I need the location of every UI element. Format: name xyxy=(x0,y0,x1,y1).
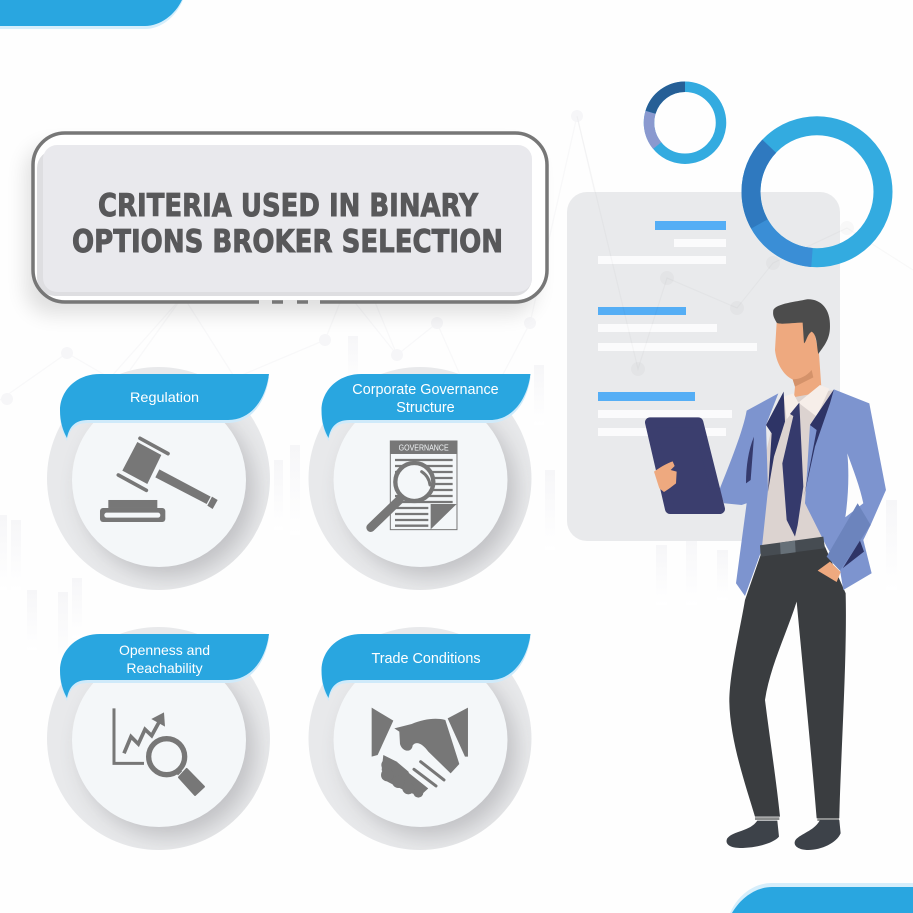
icon: governance document with magnifier: GOVERNANCE xyxy=(399,443,449,453)
jacket inner shadow xyxy=(746,437,754,483)
gap between arm and body xyxy=(845,453,863,517)
sleeve lining xyxy=(843,541,864,568)
document lines: group 2 xyxy=(598,307,757,351)
faint chart line across panel xyxy=(577,116,913,376)
shirt xyxy=(760,390,833,547)
businessman illustration xyxy=(650,299,886,850)
legs xyxy=(729,547,846,818)
tablet xyxy=(650,422,720,509)
label: Trade Conditions xyxy=(371,651,481,667)
icon: governance document with magnifier xyxy=(371,441,457,530)
belt xyxy=(760,537,825,557)
belt buckle xyxy=(780,541,796,554)
large donut chart xyxy=(751,126,883,258)
label: Openness and xyxy=(119,642,210,658)
title outline with gap xyxy=(33,133,547,302)
label: Corporate Governance xyxy=(352,382,499,398)
title dashes xyxy=(272,300,308,304)
sleeve fold xyxy=(827,503,871,571)
icon: chart with magnifier xyxy=(114,708,204,795)
pocket hand xyxy=(818,562,841,582)
document panel xyxy=(567,192,840,541)
label: Regulation xyxy=(130,389,199,405)
icon: handshake xyxy=(372,708,468,798)
icon: gavel xyxy=(100,438,218,522)
title inner plate xyxy=(43,145,532,292)
background: faint chart pattern xyxy=(0,110,897,667)
collar xyxy=(784,385,829,419)
right shoe xyxy=(795,820,841,850)
right lapel xyxy=(804,389,834,497)
hair xyxy=(773,299,830,354)
jaw shadow xyxy=(793,370,813,387)
label: Reachability xyxy=(126,660,203,676)
hand holding tablet xyxy=(654,461,677,492)
title text: OPTIONS BROKER SELECTION xyxy=(72,224,503,260)
sock cuffs xyxy=(755,815,839,824)
card: Corporate Governance Structure xyxy=(308,367,532,590)
title text: CRITERIA USED IN BINARY xyxy=(98,188,478,224)
neck and face xyxy=(775,320,822,405)
card: Openness and Reachability xyxy=(47,627,270,850)
bottom-right corner ribbon xyxy=(730,883,913,913)
document lines: group 3 xyxy=(598,392,732,436)
left lapel xyxy=(766,392,785,492)
card: Regulation xyxy=(47,367,270,590)
top-left corner ribbon xyxy=(0,0,183,29)
necktie xyxy=(782,403,803,537)
left shoe xyxy=(727,821,779,848)
jacket xyxy=(719,389,886,596)
document lines: group 1 xyxy=(598,221,726,264)
title panel xyxy=(26,133,547,314)
label: Structure xyxy=(396,400,455,416)
small donut chart xyxy=(649,87,721,159)
card: Trade Conditions xyxy=(308,627,532,850)
